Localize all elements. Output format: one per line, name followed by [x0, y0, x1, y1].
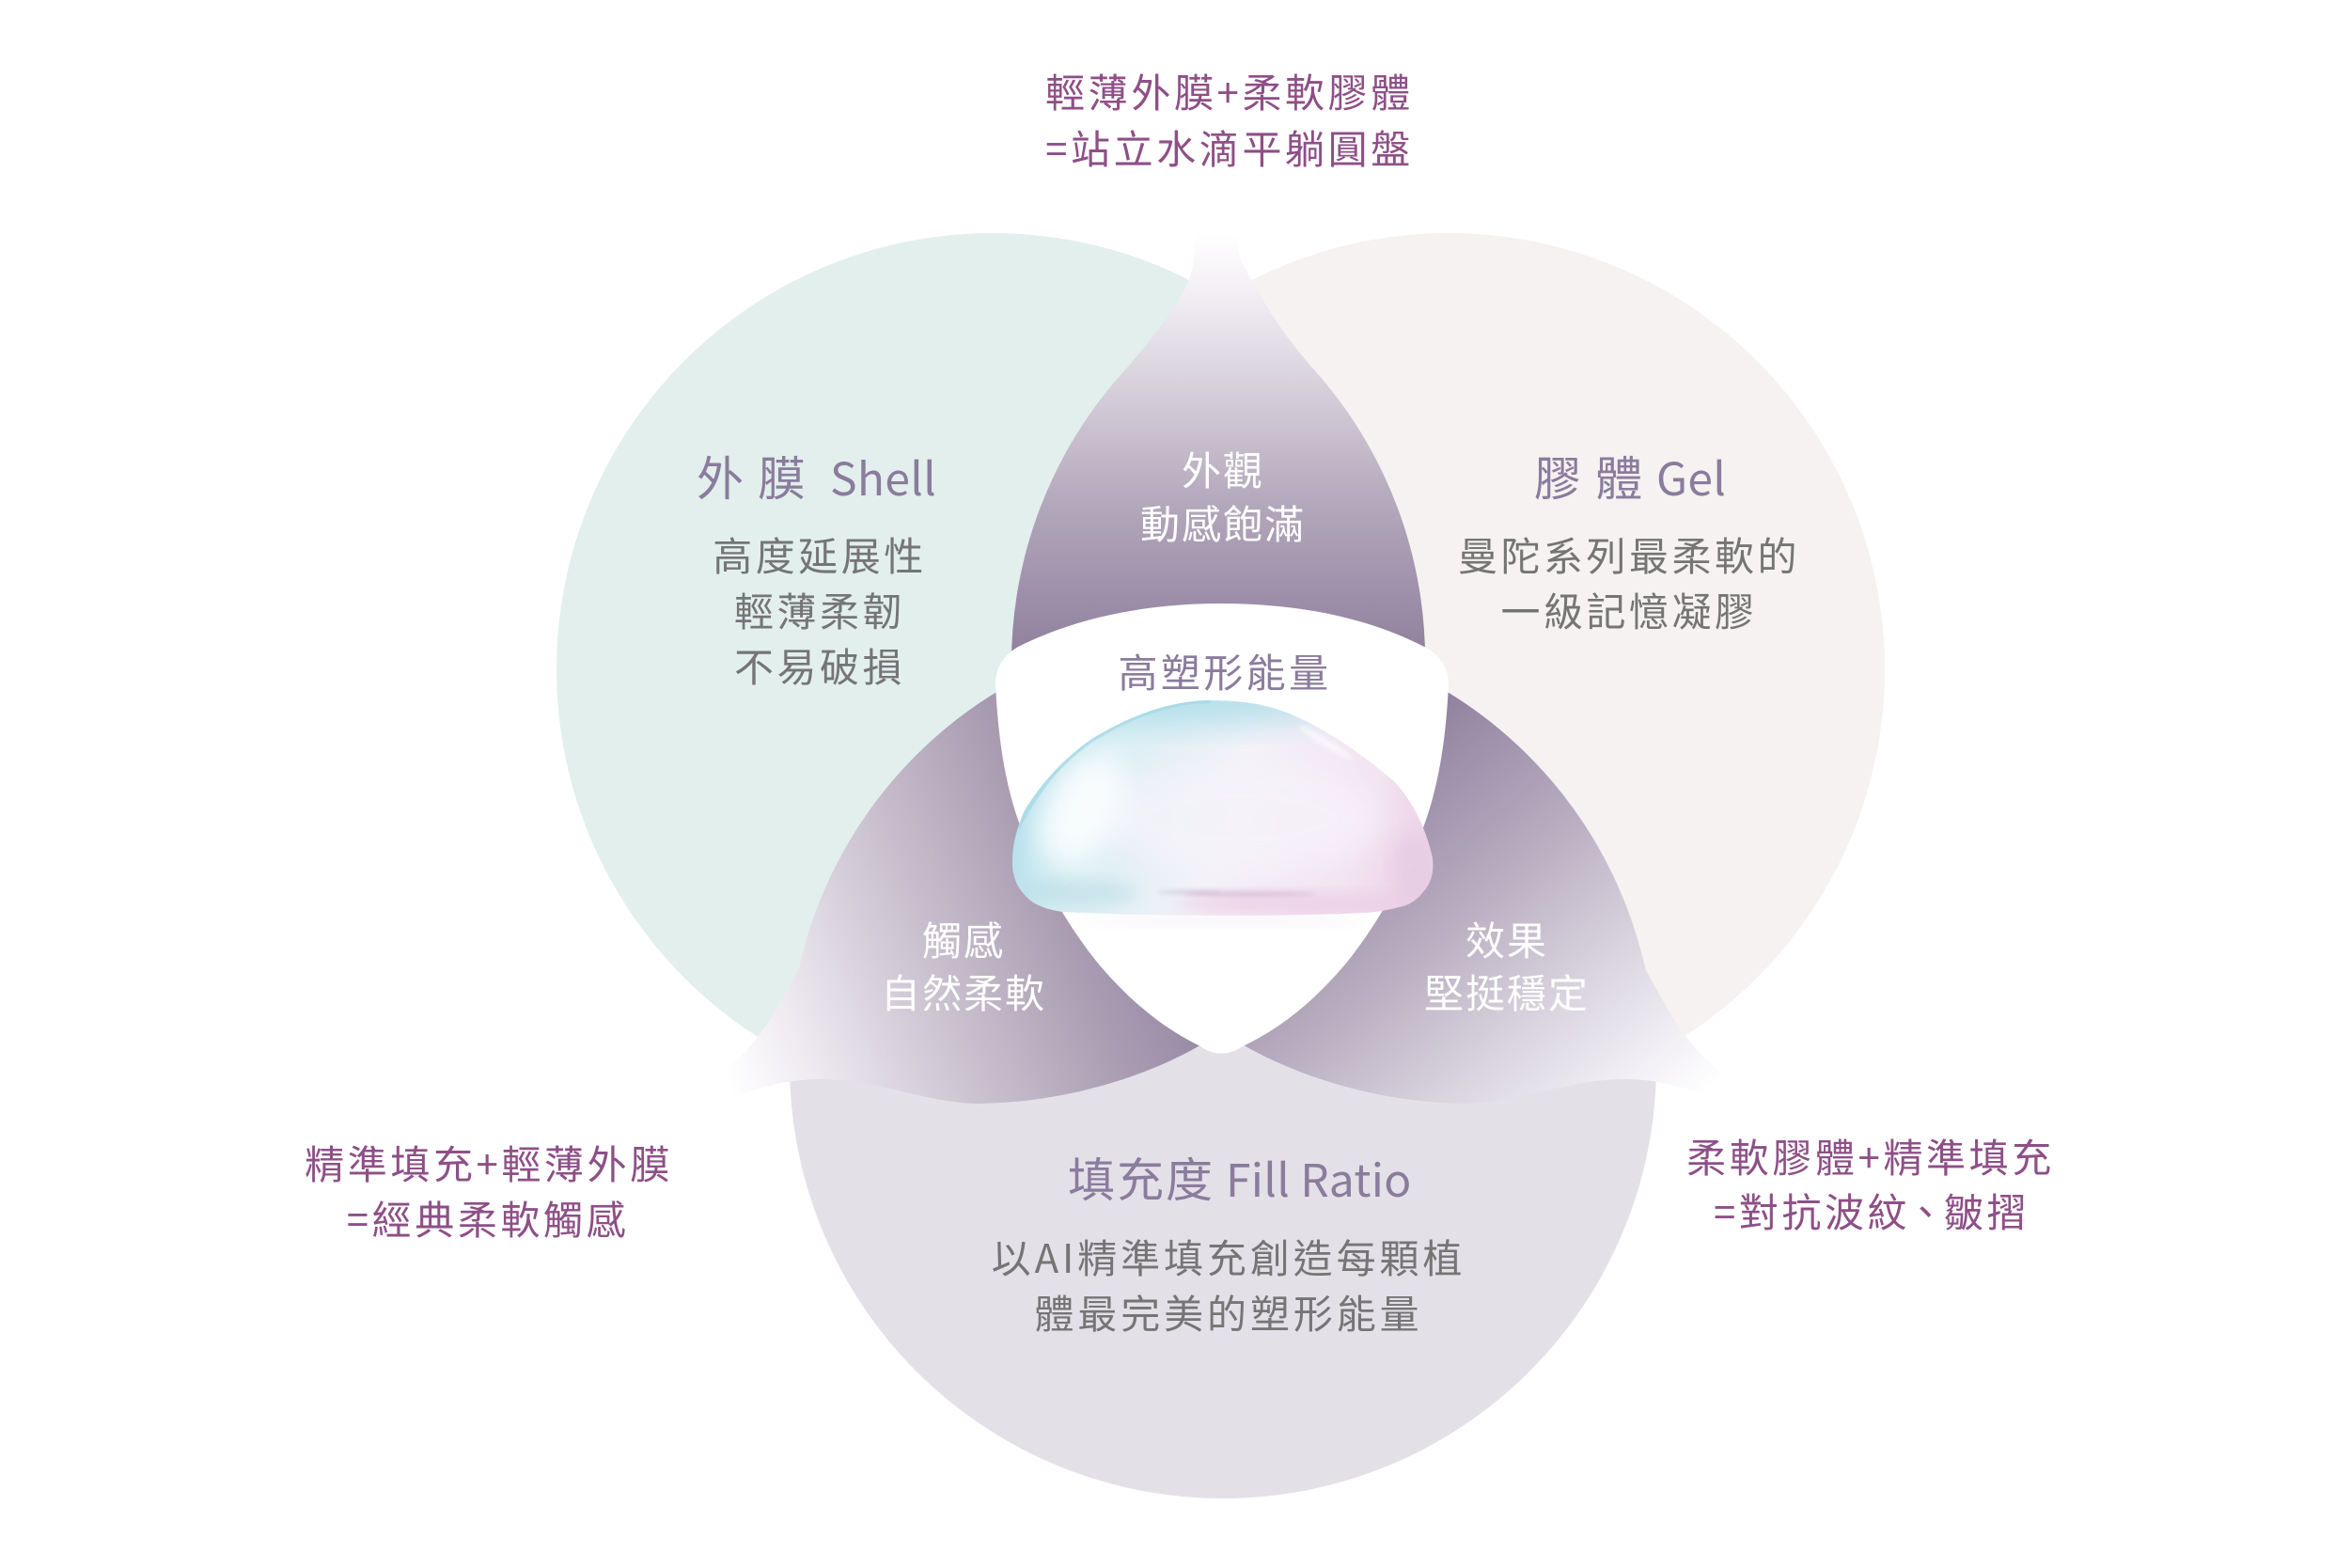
heading: shell: 外 膜 — [697, 442, 807, 510]
callout: top: =站立水滴平躺圓盤 — [1045, 118, 1414, 176]
text: touch: 自然柔軟 — [881, 963, 1046, 1020]
petal: touch — [722, 691, 1222, 1104]
text: shell description: 高度延展性 — [713, 525, 927, 583]
text: shell description: 不易破損 — [734, 636, 905, 694]
panel: shell circle — [556, 233, 1429, 1105]
venn diagram infographic — [306, 73, 2050, 1498]
text: appearance: 外觀 — [1182, 440, 1264, 497]
text: appearance: 動感飽滿 — [1140, 494, 1306, 551]
text: gel description: 一級記憶凝膠 — [1500, 581, 1758, 638]
icon: teardrop implant — [1012, 700, 1433, 916]
callout: right: 柔軟膠體+精準填充 — [1686, 1127, 2055, 1184]
text: effect: 效果 — [1465, 910, 1548, 967]
panel: gel circle — [1012, 233, 1885, 1105]
text: shell description — [713, 525, 927, 694]
text: fill ratio description — [992, 1228, 1465, 1341]
petal: appearance — [1011, 233, 1425, 733]
callout: left — [305, 1134, 673, 1247]
callout: left: 精準填充+輕薄外膜 — [305, 1134, 673, 1191]
text: gel description — [1458, 525, 1800, 638]
callout: right: =對抗波紋、皺摺 — [1714, 1182, 2030, 1239]
callout: top — [1045, 62, 1414, 176]
callout: left: =經典柔軟觸感 — [347, 1189, 629, 1247]
text: center title: 高塑形能量 — [1118, 642, 1332, 699]
heading: fill ratio: Fill Ratio — [1226, 1144, 1412, 1210]
heading: shell: Shell — [830, 443, 936, 509]
heading: fill ratio: 填充度 — [1068, 1143, 1215, 1211]
text: touch — [881, 910, 1046, 1020]
text: appearance — [1140, 440, 1306, 551]
panel: fill ratio circle — [790, 632, 1656, 1498]
text: effect — [1424, 910, 1590, 1020]
callout: right — [1686, 1127, 2055, 1239]
text: gel description: 曼陀系列最柔軟的 — [1458, 525, 1800, 583]
callout: top: 輕薄外膜+柔軟膠體 — [1045, 62, 1414, 119]
text: fill ratio description: 體最完美的塑形能量 — [1034, 1283, 1423, 1341]
text: touch: 觸感 — [922, 910, 1005, 967]
text: shell description: 輕薄柔韌 — [734, 581, 905, 638]
text: effect: 堅挺穩定 — [1424, 963, 1590, 1020]
heading: gel: 膠 體 — [1534, 442, 1644, 510]
petal: effect — [1222, 691, 1722, 1104]
center white shield — [995, 604, 1449, 1053]
heading: gel: Gel — [1656, 443, 1726, 509]
text: fill ratio description: 以AI精準填充創造每顆植 — [992, 1228, 1465, 1285]
